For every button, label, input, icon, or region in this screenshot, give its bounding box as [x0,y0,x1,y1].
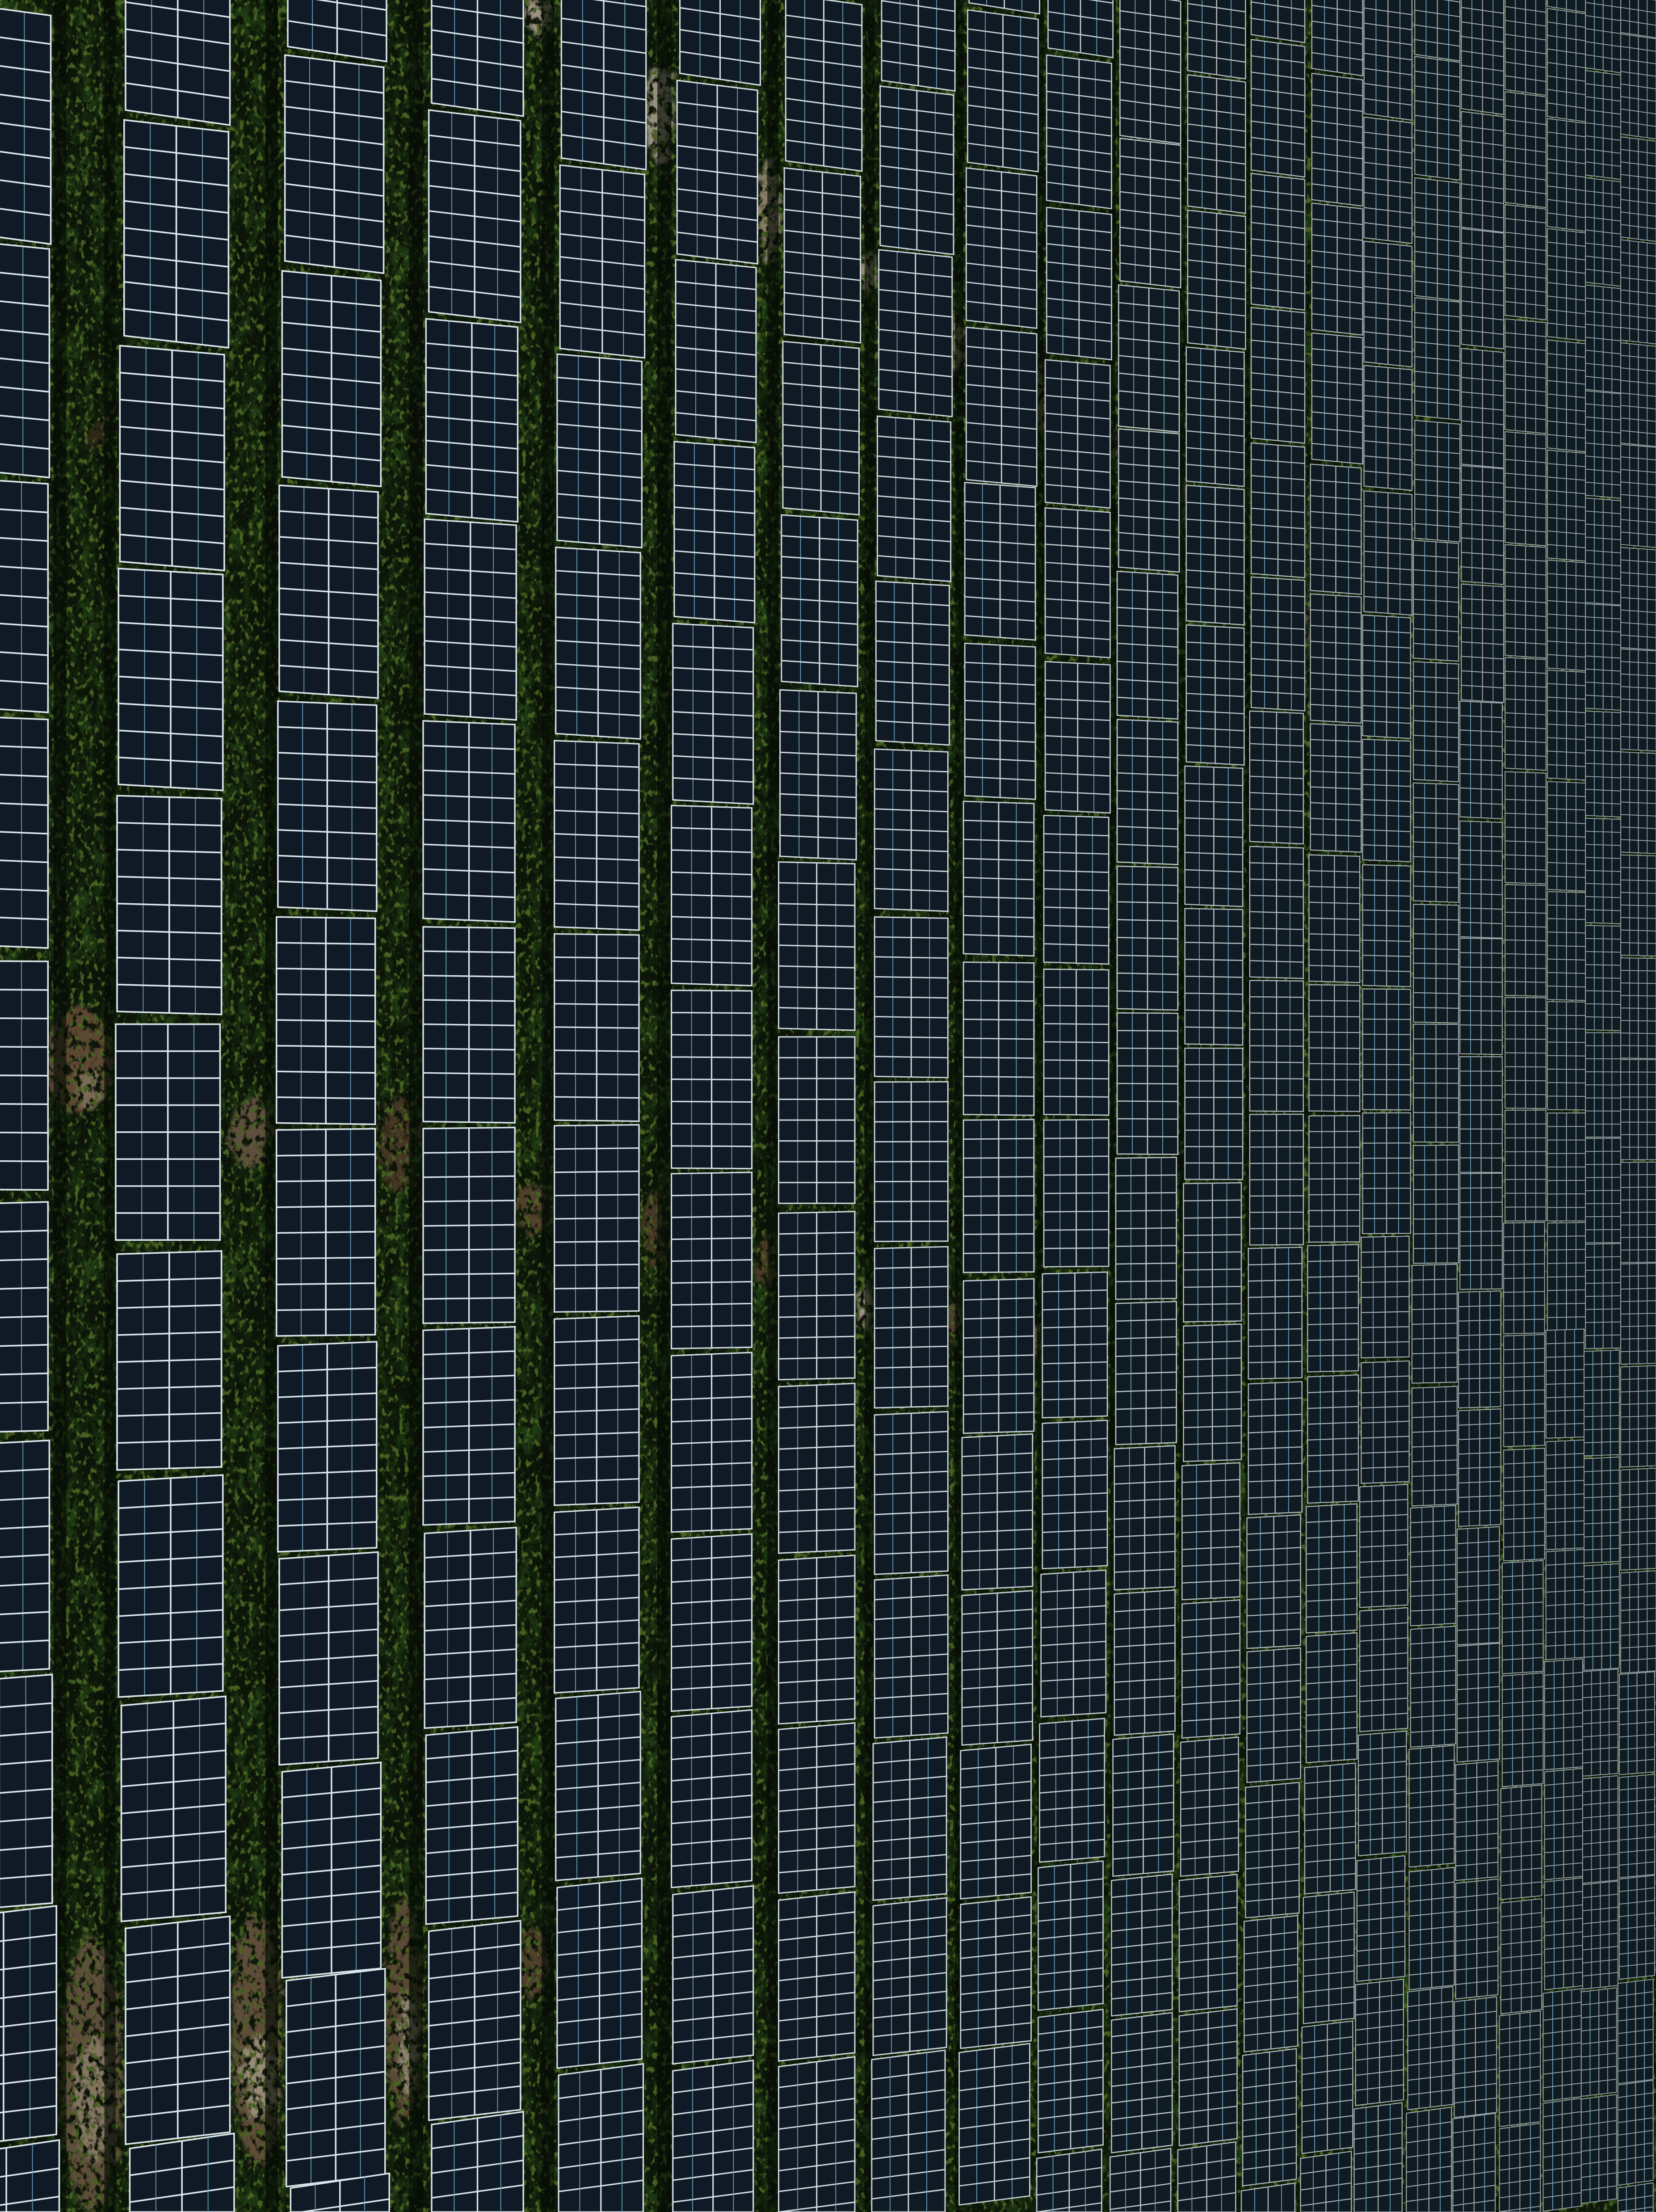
panel row 19 [1581,0,1621,2204]
panel row 4 [555,0,646,2212]
panel row 12 [1241,0,1305,2212]
panel row 7 [872,0,955,2212]
panel row 5 [672,0,760,2212]
panel row 9 [1037,0,1113,2212]
panel row 0 [0,1,59,2212]
panel row 1 [116,0,234,2212]
panel row 3 [423,0,523,2212]
panel row 17 [1500,0,1546,2212]
panel row 6 [779,0,862,2212]
panel row 18 [1543,0,1585,2211]
panel row 16 [1453,0,1504,2212]
panel row 15 [1406,0,1460,2212]
panel row 2 [277,0,389,2212]
panel row 20 [1618,0,1656,2212]
panel row 13 [1301,0,1362,2212]
panel row 14 [1354,0,1412,2212]
bare soil patches between rows [48,0,1311,2212]
panel row 10 [1110,0,1181,2212]
panel row 11 [1178,0,1245,2212]
panel row 8 [959,0,1040,2205]
